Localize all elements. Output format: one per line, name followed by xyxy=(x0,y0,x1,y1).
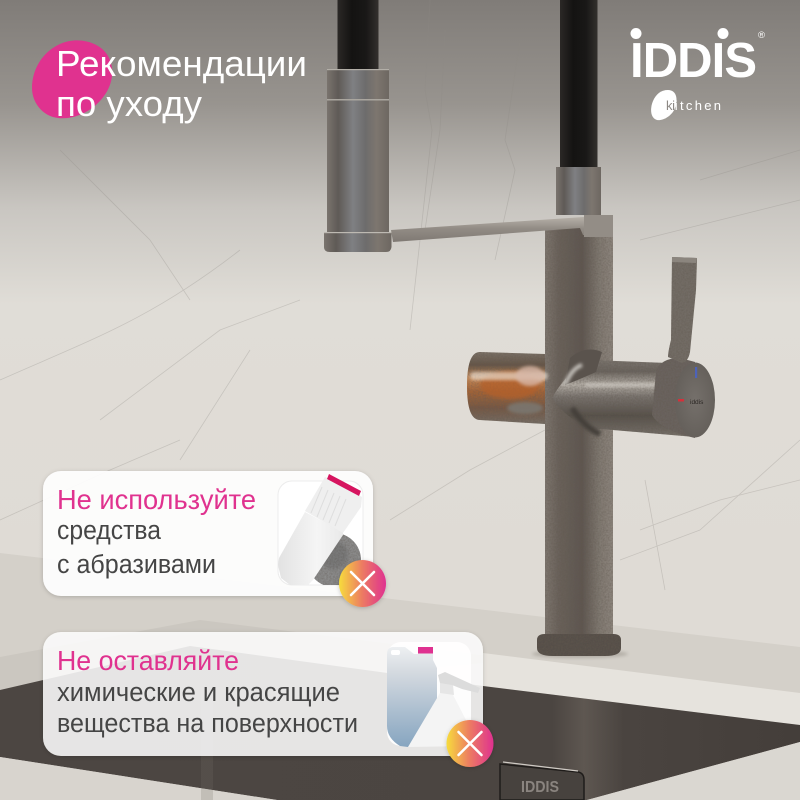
collar xyxy=(556,167,601,215)
kitchen mark: ki xyxy=(666,98,675,113)
brand wordmark: ® xyxy=(758,30,765,41)
rusty left stub xyxy=(467,352,548,424)
title xyxy=(56,43,307,124)
body text xyxy=(57,679,358,738)
handle cap: iddis xyxy=(690,399,704,406)
main column xyxy=(545,228,613,636)
title: Рекомендации xyxy=(56,43,307,84)
badge: prohibited xyxy=(446,720,494,767)
lever xyxy=(668,257,697,363)
heading: Не оставляйте xyxy=(57,645,239,676)
heading: Не используйте xyxy=(57,484,256,515)
sink drain plate with IDDIS mark: IDDIS xyxy=(521,779,559,796)
sink drain plate with IDDIS mark xyxy=(500,762,584,800)
body text xyxy=(57,517,216,579)
handle cap xyxy=(652,358,715,438)
title: по уходу xyxy=(56,83,203,124)
pink blob xyxy=(32,40,112,118)
spout head cylinder xyxy=(324,69,392,252)
base shadow xyxy=(532,650,628,658)
right black hose xyxy=(560,0,598,168)
brand wordmark: IDDIS xyxy=(630,34,757,88)
horizontal arm xyxy=(391,215,613,242)
body text: с абразивами xyxy=(57,551,216,579)
kitchen mark: kitchen xyxy=(666,98,723,113)
column base ring xyxy=(537,634,621,656)
icon: canister and spray bottle xyxy=(387,642,480,747)
body text: средства xyxy=(57,517,162,545)
left black hose xyxy=(338,0,378,70)
right handle barrel xyxy=(552,360,695,437)
faucet xyxy=(324,0,715,658)
logo: iddis kitchen xyxy=(630,28,765,120)
kitchen mark xyxy=(651,90,723,120)
body text: химические и красящие xyxy=(57,679,340,707)
badge: prohibited xyxy=(339,560,386,607)
panel: do not leave chemicals xyxy=(43,632,494,767)
countertop and sink xyxy=(0,553,800,800)
icon: abrasive bottle and steel wool xyxy=(278,474,363,587)
body text: вещества на поверхности xyxy=(57,710,358,738)
panel: do not use abrasives xyxy=(43,471,386,607)
